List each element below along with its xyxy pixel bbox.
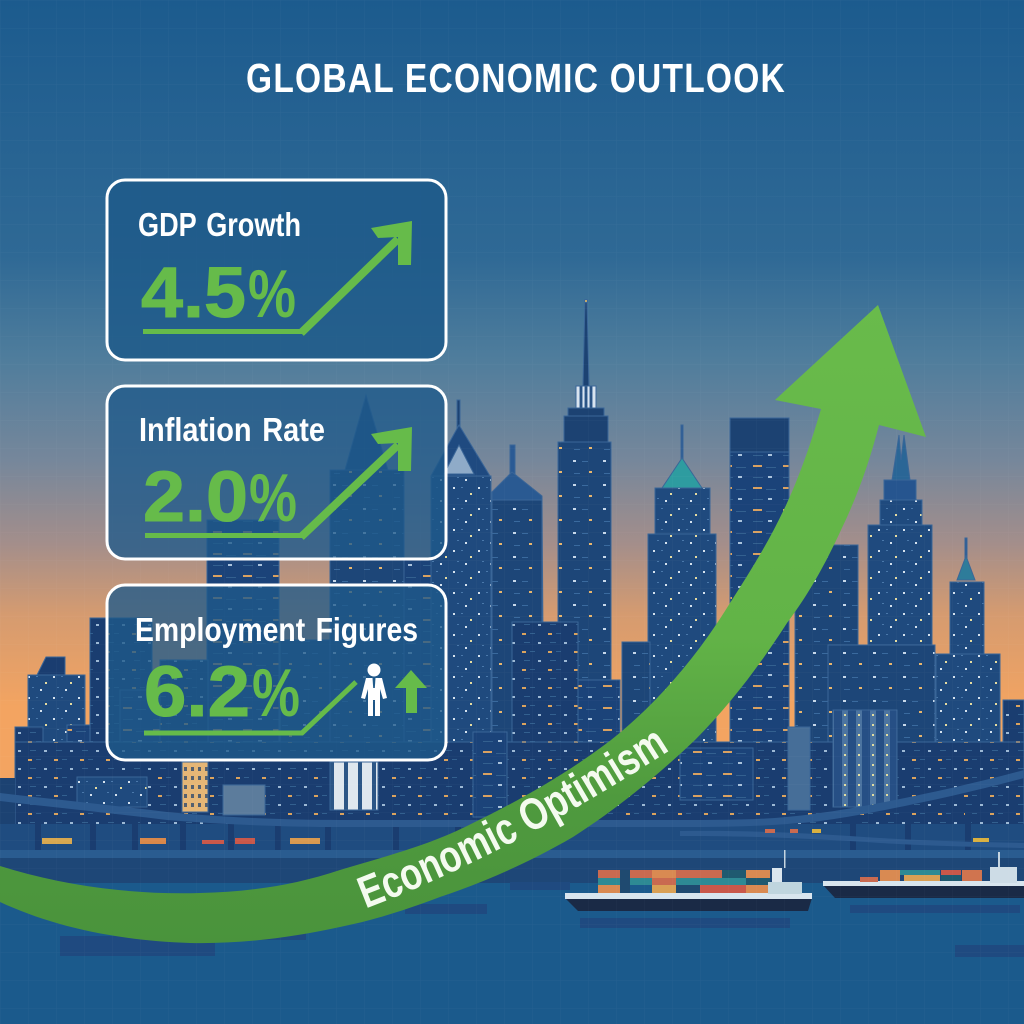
tower: twin spike crown: [828, 435, 935, 795]
arrow label: Economic Optimism: [356, 733, 668, 908]
inflation trend arrow: [145, 427, 412, 538]
inflation value: [143, 458, 297, 537]
panel: inflation rate: [107, 386, 446, 559]
bridge pillars: [35, 805, 971, 852]
GDP trend arrow: [143, 221, 412, 334]
employment trend line: [144, 682, 356, 733]
icon: worker: [361, 664, 387, 716]
GDP heading: GDP Growth: [138, 206, 301, 243]
tower: flat top with dark cap: [730, 418, 789, 792]
GDP value: %: [248, 256, 296, 332]
tower: triangular crown: [431, 400, 491, 786]
inflation value: 2.0: [143, 458, 248, 537]
tower: slim spire tower: [492, 445, 543, 780]
tower: faded rear towers behind cards: [160, 395, 434, 792]
inflation heading: Inflation Rate: [139, 411, 325, 448]
panel: employment figures: [107, 585, 446, 760]
cargo ship: right: [823, 852, 1024, 898]
water: [0, 882, 1024, 1024]
tower: low block in front: [512, 622, 620, 792]
containers: left ship: [598, 870, 770, 893]
icon: up arrow: [395, 670, 427, 713]
cargo ship: left: [565, 850, 812, 911]
employment value: [144, 653, 300, 732]
water reflections: [60, 882, 1024, 957]
tower: rear mid block: [795, 545, 858, 792]
employment value: 6.2: [144, 653, 250, 732]
tower: far left cluster: [15, 618, 170, 793]
highway bridge: [0, 770, 1024, 860]
GDP value: [141, 254, 296, 333]
inflation value: %: [249, 460, 297, 536]
employment value: %: [252, 655, 300, 731]
tower: small spire tower: [936, 538, 1024, 794]
harbor quay: [0, 858, 1024, 884]
tower: teal crown: [622, 425, 716, 794]
GDP value: 4.5: [141, 254, 246, 333]
skyline: [15, 300, 1024, 832]
panel: GDP growth: [107, 180, 446, 360]
lower city filler: [15, 742, 1024, 832]
employment heading: Employment Figures: [135, 611, 418, 648]
title: GLOBAL ECONOMIC OUTLOOK: [246, 55, 786, 101]
tower: foreground block row: [77, 710, 897, 817]
tower: central skyscraper with antenna: [558, 300, 611, 742]
